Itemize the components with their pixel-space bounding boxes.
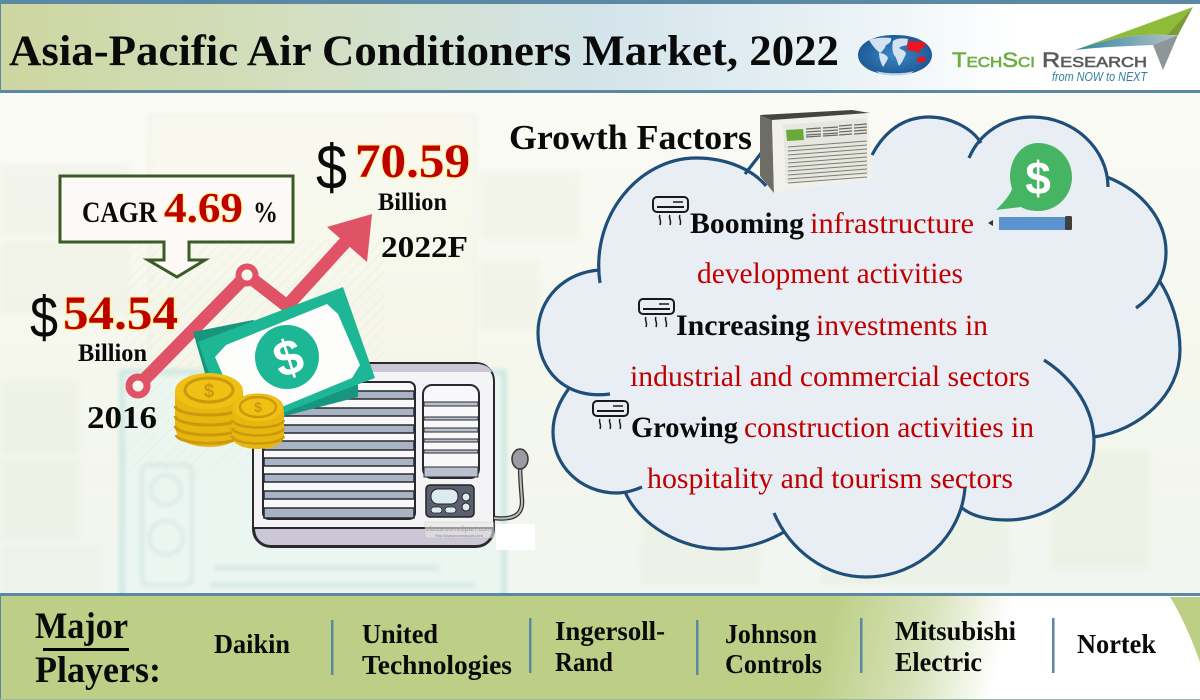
growth factor 2 <box>630 310 1030 393</box>
player: Ingersoll-Rand <box>555 615 665 677</box>
illustration: banknotes: $ <box>266 327 310 389</box>
icon: growth arrow <box>129 214 372 395</box>
value: 2022 forecast: Billion <box>378 189 447 216</box>
value: 2016: $ <box>30 285 58 350</box>
growth factor 2: investments in <box>816 310 988 342</box>
illustration: large window air conditioner <box>253 363 535 550</box>
header band <box>0 0 1200 93</box>
player: Mitsubishi Electric <box>895 615 1016 677</box>
callout: CAGR: CAGR <box>82 196 157 229</box>
logo: TechSci Research <box>952 7 1193 84</box>
value: 2022 forecast: 70.59 <box>355 135 470 188</box>
value: 2016: Billion <box>78 340 147 367</box>
value: 2016: 2016 <box>87 399 157 435</box>
panel: major players band <box>0 593 1200 700</box>
value: 2022 forecast: 2022F <box>381 229 468 264</box>
player: Ingersoll-Rand: Rand <box>555 646 613 677</box>
growth factor 1: development activities <box>697 258 963 290</box>
logo: TechSci Research: TechSci <box>952 49 1035 72</box>
value: 2016 <box>30 285 178 435</box>
growth factor 3: hospitality and tourism sectors <box>647 463 1013 495</box>
heading: major players: Major <box>35 606 128 647</box>
illustration: gold coins: $ <box>204 381 215 402</box>
callout: CAGR: 4.69 <box>164 186 243 232</box>
heading: growth factors: Growth Factors <box>509 118 752 157</box>
growth factor 3 <box>631 412 1034 495</box>
player: United Technologies: United <box>362 618 438 649</box>
icon: air conditioner small 1 <box>653 197 688 225</box>
player: Mitsubishi Electric: Electric <box>895 646 982 677</box>
title: Asia-Pacific Air Conditioners Market, 2022 <box>9 27 839 75</box>
value: 2022 forecast: $ <box>316 133 347 203</box>
callout: CAGR <box>60 176 293 277</box>
growth factor 3: construction activities in <box>744 412 1034 444</box>
illustration: large window air conditioner: http://classroomclipart.com <box>435 533 483 538</box>
growth factor 1 <box>690 208 974 290</box>
growth factor 2: industrial and commercial sectors <box>630 361 1030 393</box>
icon: air conditioner small 3 <box>593 401 628 429</box>
player: Nortek: Nortek <box>1077 628 1157 659</box>
illustration: large window air conditioner: classroomclipart.com <box>426 526 492 533</box>
player: United Technologies: Technologies <box>362 649 512 680</box>
growth factor 2: Increasing <box>676 310 810 342</box>
callout: CAGR: % <box>253 196 278 229</box>
player: Mitsubishi Electric: Mitsubishi <box>895 615 1016 646</box>
player: Daikin: Daikin <box>214 628 290 659</box>
growth factor 1: Booming <box>690 208 804 240</box>
icon: air conditioner small 2 <box>639 299 674 327</box>
heading: major players <box>35 606 161 691</box>
icon: world globe <box>858 35 932 76</box>
logo: TechSci Research: Research <box>1042 49 1147 72</box>
icon: dollar speech bubble <box>996 143 1072 211</box>
icon: window air conditioner <box>760 110 872 193</box>
player: Johnson Controls: Controls <box>725 648 822 679</box>
value: 2016: 54.54 <box>63 287 178 340</box>
growth factor 1: infrastructure <box>810 208 974 240</box>
illustration: banknotes <box>193 287 375 433</box>
panel: growth factors cloud <box>538 117 1180 577</box>
illustration: gold coins: $ <box>254 399 262 415</box>
logo: TechSci Research: from NOW to NEXT <box>1052 69 1148 84</box>
player: Johnson Controls <box>725 618 822 679</box>
heading: major players: Players: <box>35 650 161 691</box>
icon: pencil <box>988 216 1072 230</box>
growth factor 3: Growing <box>631 412 738 444</box>
background <box>0 92 1200 612</box>
value: 2022 forecast <box>316 133 470 264</box>
player: Ingersoll-Rand: Ingersoll- <box>555 615 665 646</box>
icon: dollar speech bubble: $ <box>1025 152 1051 204</box>
player: Johnson Controls: Johnson <box>725 618 817 649</box>
player: United Technologies <box>362 618 512 680</box>
illustration: gold coins <box>175 373 284 449</box>
